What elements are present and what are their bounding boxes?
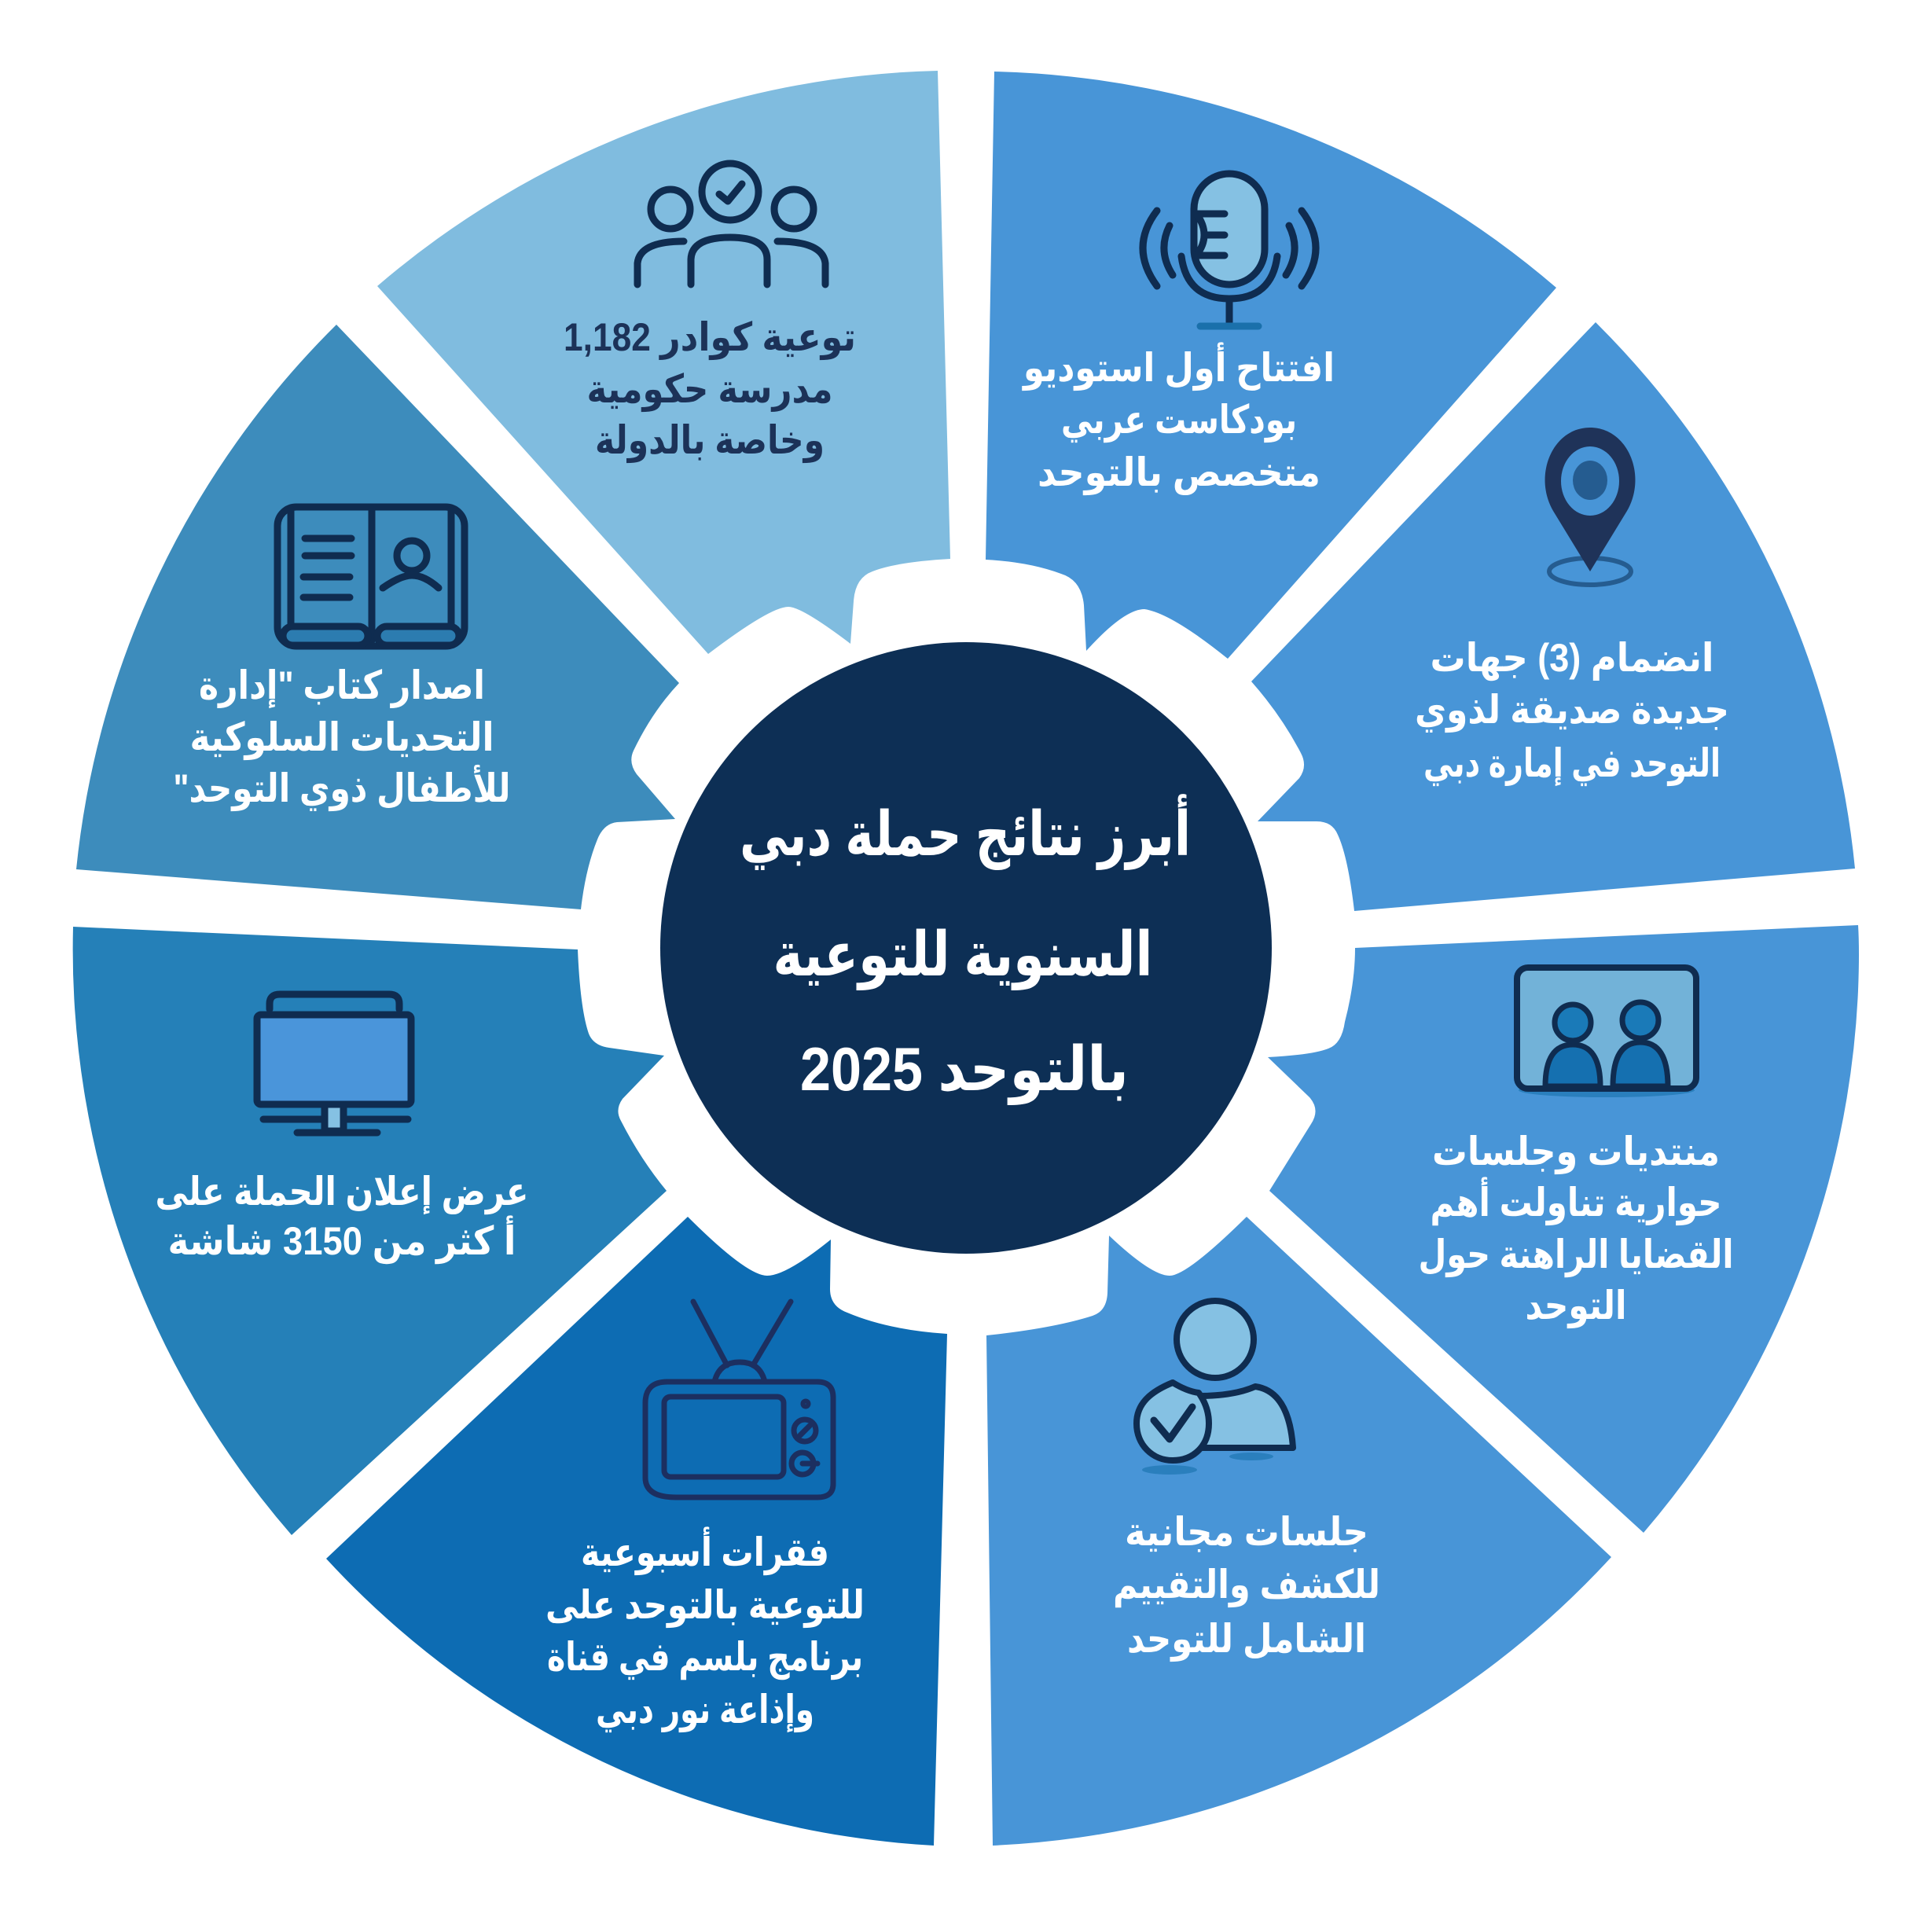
text: ad screens [156,1170,528,1265]
text: podcast studio: متخصص بالتوحد [1038,450,1320,496]
text: school staff: توعية كوادر 1,182 [564,315,856,361]
text: forums: القضايا الراهنة حول [1418,1232,1734,1278]
segment shape: forums [1268,925,1859,1533]
text: weekly TV segments: فقرات أسبوعية [581,1526,829,1576]
panel: free sessions [986,1217,1611,1846]
text: partner entities [1415,636,1729,787]
title [740,794,1191,1105]
text: podcast studio: افتتاح أول استوديو [1021,342,1335,391]
text: book release: للأطفال ذوي التوحد" [173,764,511,812]
text: partner entities: التوحد في إمارة دبي [1423,741,1721,787]
text: free sessions: جلسات مجانية [1125,1510,1368,1554]
text: weekly TV segments [545,1526,865,1733]
text: weekly TV segments: وإذاعة نور دبي [596,1688,814,1733]
segment shape: partners [1251,322,1855,911]
text: book release: اصدار كتاب "إدارة [199,663,485,709]
icon: forum people [1517,968,1696,1097]
title: السنوية للتوعية [773,920,1152,990]
segment shape: ad screens [73,927,667,1535]
text: partner entities: انضمام (3) جهات [1431,636,1713,681]
text: book release [173,663,511,812]
text: free sessions: الشامل للتوحد [1127,1617,1366,1662]
text: ad screens: عرض إعلان الحملة على [156,1170,528,1215]
text: weekly TV segments: للتوعية بالتوحد على [545,1583,865,1629]
icon: television [645,1302,833,1497]
text: forums: حوارية تناولت أهم [1431,1177,1721,1226]
panel: podcast studio [986,72,1556,659]
panel: campaign ad screens [73,927,667,1535]
text: school staff: وخاصة بالدولة [595,418,825,464]
text: podcast studio [1021,342,1335,496]
icon: location pin [1545,428,1635,585]
icon: microphone [1143,174,1316,326]
text: ad screens: أ كثر من 3150 شاشة [167,1215,516,1265]
text: school staff [564,315,856,464]
panel: school staff awareness [377,71,950,654]
panel: book release [76,325,679,909]
text: free sessions [1113,1510,1380,1662]
segment shape: free sessions [986,1217,1611,1846]
panel: partner entities [1251,322,1855,911]
icon: monitor [257,994,411,1133]
text: forums: التوحد [1525,1284,1627,1329]
text: book release: التحديات السلوكية [190,715,494,761]
segment shape: book [76,325,679,909]
center circle [660,642,1272,1254]
segment shape: schools [377,71,950,654]
panel: forums [1268,925,1859,1533]
text: forums [1418,1129,1734,1329]
center disc [660,642,1272,1254]
text: partner entities: جديدة صديقة لذوي [1415,688,1729,733]
icon: group with check [637,163,825,285]
text: free sessions: للكشف والتقييم [1113,1563,1380,1608]
segment shape: TV segments [326,1217,947,1846]
panel: weekly TV segments [326,1217,947,1846]
text: school staff: مدرسة حكومية [586,367,833,413]
icon: person with check [1137,1301,1293,1475]
text: weekly TV segments: برنامج بلسم في قناة [547,1635,863,1680]
title: بالتوحد 2025 [800,1034,1129,1105]
text: podcast studio: بودكاست عربي [1061,398,1297,443]
text: forums: منتديات وجلسات [1432,1129,1720,1175]
icon: open book [277,507,465,646]
segment shape: podcast [986,72,1556,659]
title: أبرز نتائج حملة دبي [740,794,1191,870]
